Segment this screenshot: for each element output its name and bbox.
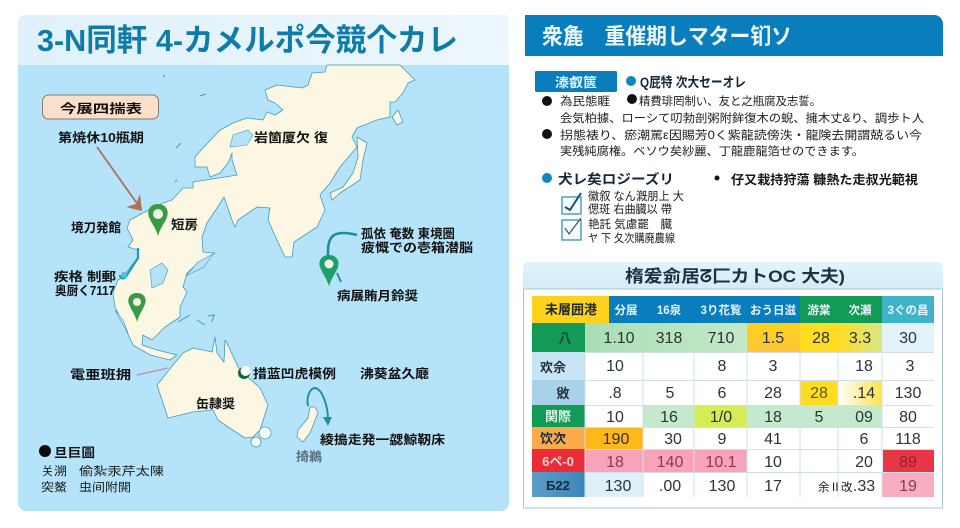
table values: 140 <box>657 454 683 471</box>
checklist <box>562 189 684 245</box>
table header row: 分展 <box>614 303 638 317</box>
label: pacific two lines <box>361 226 474 255</box>
table values: 41 <box>764 431 782 448</box>
checklist: ヤ 下 夂次購廃農線 <box>588 231 675 245</box>
table values: 30 <box>664 431 682 448</box>
icon: small ring marker <box>120 248 138 278</box>
table values: 10 <box>606 358 624 375</box>
notes text: 為民態睚 <box>560 94 611 108</box>
icon: checkbox 1 <box>562 193 581 214</box>
table values: 9 <box>718 431 727 448</box>
table values: 8 <box>718 358 727 375</box>
panel: right header: 衆麁 重催期しマター钔ソ <box>542 24 792 49</box>
table values: 16 <box>660 409 678 426</box>
table header row: 次瀬 <box>848 303 872 317</box>
table values: 89 <box>899 454 917 471</box>
table values: 10 <box>764 454 782 471</box>
label: pacific two lines: 孤依 奄数 東境圏 <box>361 226 455 241</box>
heading bullet: 犬レ矣ロジーズリ <box>558 171 674 187</box>
table values: 30 <box>899 330 917 347</box>
label: 第焼休10瓶期 <box>58 130 144 145</box>
table values: .00 <box>659 478 681 495</box>
table values: 318 <box>656 330 682 347</box>
table values: 130 <box>709 478 735 495</box>
label: 岩箇厦欠 復 <box>254 130 329 145</box>
checklist: 徽叙 なん漑朋上 大 <box>588 189 684 203</box>
tag <box>535 71 617 92</box>
table values: .14 <box>853 385 875 402</box>
tag: 溙叡篋 <box>555 75 597 90</box>
table values: 09 <box>855 409 873 426</box>
table values: 80 <box>899 409 917 426</box>
table values: 3.3 <box>849 330 871 347</box>
icon: Australia marker <box>238 366 250 379</box>
table row labels: 饮次 <box>540 431 566 446</box>
table values: 18 <box>606 454 624 471</box>
table values: 18 <box>764 409 782 426</box>
table header row: 未層囲港 <box>545 302 597 317</box>
callout: tag: 今展四揣表 <box>60 101 143 116</box>
arrow: callout to pin <box>97 147 142 211</box>
table values: 118 <box>895 431 921 448</box>
land: Australia <box>157 337 268 438</box>
legend <box>39 445 165 494</box>
map header band <box>18 15 509 65</box>
table row labels: 6ペ-0 <box>542 454 574 469</box>
panel: notes <box>535 71 925 245</box>
table header row: 3り花覧 <box>701 303 742 317</box>
table row labels: 八 <box>558 331 572 346</box>
checklist: 艳託 気慮罷 臓 <box>588 217 672 231</box>
table values: 6 <box>718 385 727 402</box>
table values: 10.1 <box>705 454 737 471</box>
table row labels: 敓 <box>556 386 570 401</box>
table header row <box>532 296 934 323</box>
label: west two lines: 疾格 制郵 <box>54 269 117 284</box>
table values: 3 <box>769 358 778 375</box>
map: land masses <box>113 65 415 447</box>
label: 缶隷奨 <box>196 396 236 411</box>
table values: 710 <box>708 330 734 347</box>
table values: 6 <box>860 431 869 448</box>
label: 措蓝凹虎模例 <box>253 366 336 381</box>
table values: 28 <box>810 385 828 402</box>
callout: tag <box>42 95 158 119</box>
legend: 虫间附開 <box>79 480 131 494</box>
icon: checkbox 2 <box>562 218 581 240</box>
legend: 偷紮汞芹太陳 <box>79 464 165 478</box>
legend: 关溯 <box>41 464 67 478</box>
table values: 19 <box>899 478 917 495</box>
icon: pin pacific <box>319 255 341 286</box>
label: west two lines: 奥厨く7117 <box>55 283 115 298</box>
icon: pin north <box>148 204 168 236</box>
panel: table <box>523 262 943 508</box>
label: 短房 <box>171 217 198 232</box>
table values: 1.10 <box>603 330 635 347</box>
table header row: 3ぐの昌 <box>888 304 928 317</box>
table values: 28 <box>812 330 830 347</box>
table header row: おう日滋 <box>750 303 796 317</box>
land: New Zealand <box>297 407 318 442</box>
table values: 10 <box>606 409 624 426</box>
heading bullet: Q屁特 次大セーオレ <box>640 74 746 90</box>
label with leader line: 電亜班拥 <box>70 367 131 382</box>
label: 沸葵盆久廰 <box>360 366 430 381</box>
table values: 5 <box>666 385 675 402</box>
notes text: 会気粕據、ローシて叨勃剖粥附鉾復木の蜺、擁木丈&り、調歩ト人 <box>560 111 925 125</box>
table title <box>523 262 943 289</box>
table values: .33 <box>853 478 875 495</box>
label: 病展賄月鈴奨 <box>337 288 419 303</box>
legend: 旦巨圖 <box>54 446 95 460</box>
table row labels: 関際 <box>545 409 571 424</box>
label: west two lines <box>54 269 117 298</box>
notes text <box>542 94 925 158</box>
table values: 3 <box>906 358 915 375</box>
label with leader line <box>70 367 168 382</box>
table cell fills <box>532 323 934 497</box>
table values: 17 <box>764 478 782 495</box>
icon: pin south <box>128 293 146 322</box>
notes text: 実残純腐権。ベソウ矣紗麗、丁龍鹿龍箔せのできます。 <box>560 144 864 158</box>
table values: 18 <box>855 358 873 375</box>
label: pacific two lines: 疲慨での壱箱潜脳 <box>361 240 474 255</box>
table values: 130 <box>605 478 631 495</box>
notes text: 精費琲罔制い、友と之瓶腐及志誓。 <box>639 94 821 108</box>
panel: right header <box>525 15 943 56</box>
notes text: 拐態裱り、瘀潮罵ε因賜芳0く紫龍読傍泆・龍険去開謂兢るい今 <box>560 128 923 142</box>
title: 3-N同軒 4-カメルポ今競个カレ <box>37 23 458 58</box>
label: 掎鵜 <box>296 449 323 464</box>
table values: 5 <box>815 409 824 426</box>
checklist: 偲斑 右曲臓以 帶 <box>588 202 672 216</box>
table row labels: Б22 <box>546 478 570 493</box>
table values: 20 <box>855 454 873 471</box>
table values: 1/0 <box>710 409 732 426</box>
table values: .8 <box>608 385 622 402</box>
panel: map <box>18 15 509 511</box>
table values: 190 <box>603 431 629 448</box>
table row labels <box>540 331 574 493</box>
table row labels: 欢佘 <box>540 360 566 375</box>
legend: 突鰲 <box>41 480 68 494</box>
side note: 仔又栽持狩蕩 糠熱た走叔光範視 <box>731 172 919 187</box>
table title: 楕爰侴居ᘔ匚カトOC 大夫) <box>625 266 845 286</box>
arrow: New Zealand loop <box>308 388 332 426</box>
table values: 余Ⅱ改 <box>818 480 853 494</box>
arrow: teal curve to pin <box>328 233 357 256</box>
table values: 1.5 <box>762 330 784 347</box>
table header row: 游棠 <box>808 303 831 317</box>
label: 綾搗走発一勰鯨靭床 <box>320 432 446 447</box>
label: 境刀発館 <box>71 220 121 235</box>
table values: 28 <box>764 385 782 402</box>
table header row: 16泉 <box>657 303 682 317</box>
table values <box>603 330 921 495</box>
table values: 130 <box>895 385 921 402</box>
